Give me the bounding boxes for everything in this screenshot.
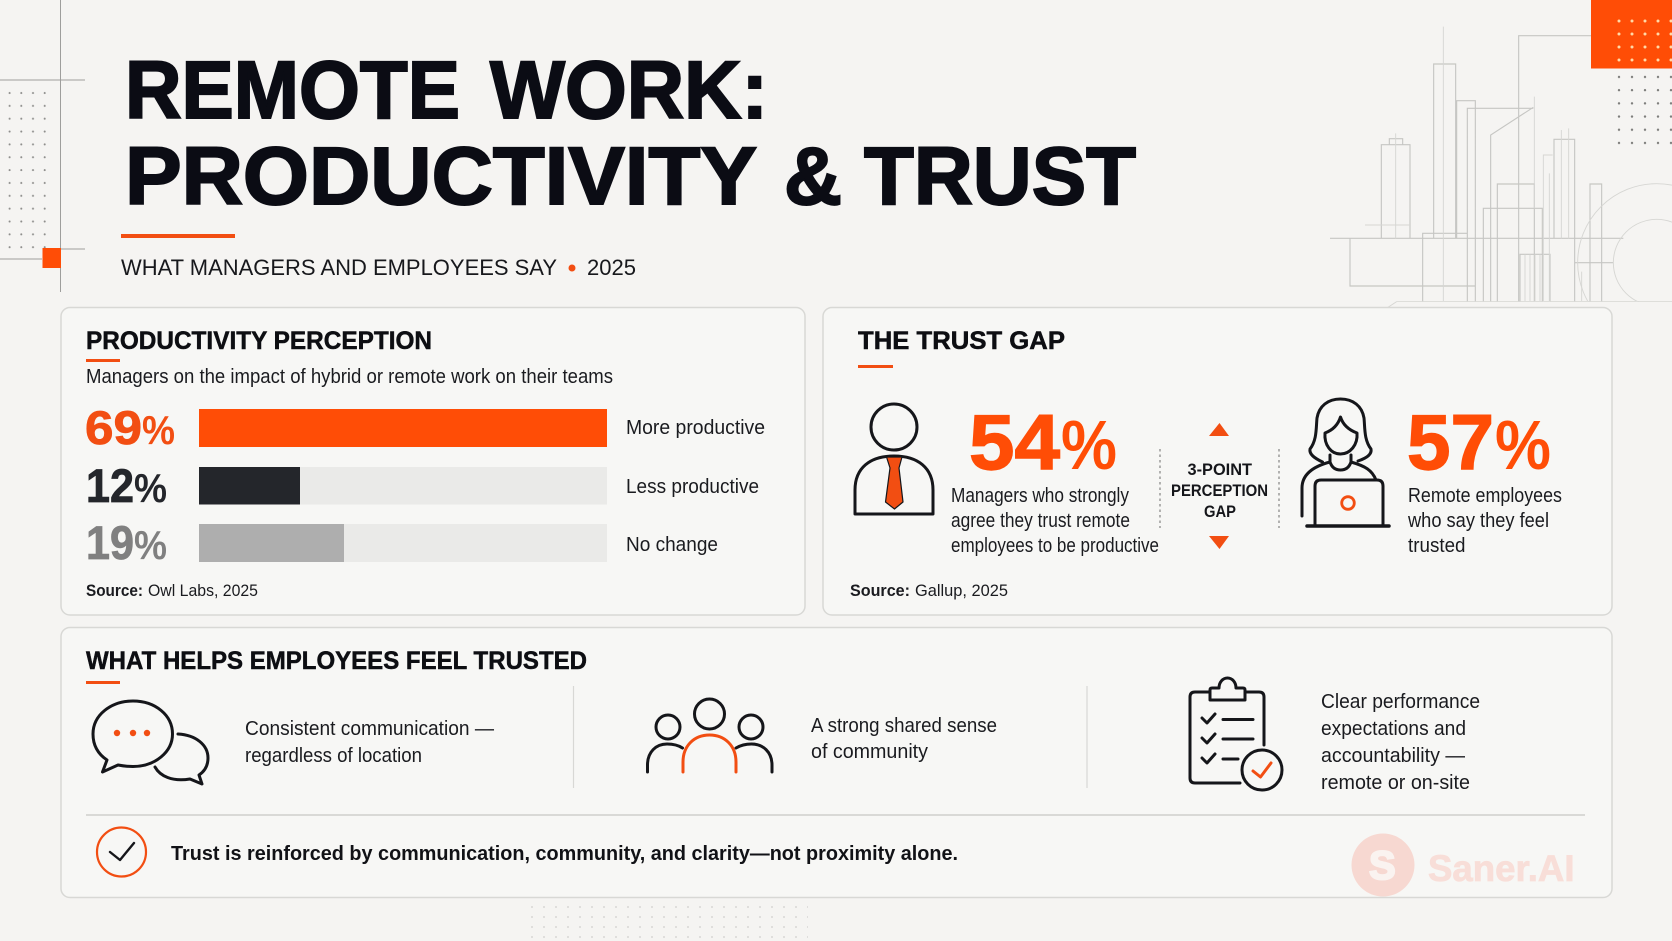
stat: 54% managers: % [1061, 406, 1117, 484]
callout: 3-point perception gap: PERCEPTION [1171, 482, 1268, 500]
heading: what helps employees feel trusted: WHAT HELPS EMPLOYEES FEEL TRUSTED [86, 647, 587, 675]
bar row: 69% more productive: % [142, 407, 175, 453]
stat: 57% remote employees: who say they feel [1407, 510, 1549, 532]
item: consistent communication [93, 701, 494, 784]
bar row: 12% less productive: 12 [86, 459, 134, 512]
text: clear performance expectations: Clear performance [1321, 691, 1480, 713]
title [125, 45, 1136, 222]
source: Gallup: Gallup, 2025 [915, 581, 1008, 600]
callout: trust statement: Trust is reinforced by communication, community, and clarity—not proximity alone. [171, 842, 958, 865]
icon: speech bubbles [93, 701, 208, 784]
text: clear performance expectations [1321, 691, 1480, 794]
heading accent rule [86, 359, 120, 362]
stat: 57% remote employees: 57 [1407, 398, 1494, 486]
stat: 54% managers: agree they trust remote [951, 510, 1130, 532]
text: shared sense of community [811, 715, 997, 763]
bar row: 19% no change: No change [626, 534, 718, 556]
stat: 57% remote employees: Remote employees [1408, 485, 1562, 507]
source: Owl Labs: Source: [86, 581, 143, 600]
watermark: Saner.AI: Saner.AI [1428, 848, 1574, 889]
panel: productivity perception [61, 308, 805, 615]
text: consistent communication: regardless of location [245, 745, 422, 767]
item: clear performance expectations [1190, 678, 1480, 794]
decoration: top-right orange block with dots [1591, 0, 1672, 150]
heading: productivity perception: PRODUCTIVITY PERCEPTION [86, 327, 432, 355]
source: Gallup: Source: [850, 581, 910, 600]
heading: the trust gap: THE TRUST GAP [858, 327, 1065, 355]
decoration: line-art city skyline [1330, 27, 1672, 342]
title: & [784, 131, 842, 222]
stat: 54% managers [951, 398, 1159, 557]
title accent rule [121, 234, 235, 238]
title: TRUST [864, 131, 1136, 222]
text: clear performance expectations: remote or on-site [1321, 772, 1470, 794]
text: shared sense of community: of community [811, 741, 928, 763]
stat: 57% remote employees: trusted [1408, 535, 1466, 557]
callout: 3-point perception gap: GAP [1204, 503, 1236, 521]
callout: trust statement [97, 828, 958, 876]
stat: 54% managers: 54 [969, 398, 1060, 486]
panel: what helps employees feel trusted [61, 628, 1612, 898]
title: PRODUCTIVITY [125, 131, 757, 222]
panel: the trust gap [823, 308, 1612, 615]
bar row: 12% less productive: Less productive [626, 476, 759, 498]
bar row: 69% more productive: More productive [626, 417, 765, 439]
panel subtitle: Managers on the impact of hybrid or remote work on their teams [86, 366, 613, 388]
source: Owl Labs: Owl Labs, 2025 [148, 581, 258, 600]
bar row: 19% no change: % [134, 522, 167, 568]
heading accent rule [858, 365, 893, 368]
item: shared sense of community [648, 699, 997, 772]
icon: clipboard with check [1190, 678, 1282, 790]
bar row: 19% no change [86, 516, 718, 569]
watermark: Saner.AI [1352, 834, 1574, 896]
text: clear performance expectations: accountability — [1321, 745, 1465, 767]
stat: 57% remote employees [1407, 398, 1562, 557]
text: shared sense of community: A strong shared sense [811, 715, 997, 737]
icon: employee with laptop [1302, 399, 1389, 526]
title: REMOTE [125, 45, 460, 136]
source: Owl Labs [86, 581, 258, 600]
bar row: 69% more productive [85, 401, 765, 454]
text: clear performance expectations: expectations and [1321, 718, 1466, 740]
text: consistent communication [245, 718, 494, 767]
callout: 3-point perception gap: 3-POINT [1188, 461, 1252, 479]
stat: 54% managers: Managers who strongly [951, 485, 1129, 507]
subtitle: 2025 [587, 255, 636, 280]
decoration: bottom dot grid [526, 902, 808, 941]
bar row: 69% more productive: 69 [85, 401, 142, 454]
bar row: 12% less productive [86, 459, 759, 512]
decoration: top-left grid lines and dots [0, 0, 85, 292]
stat: 54% managers: employees to be productive [951, 535, 1159, 557]
watermark: Saner.AI: S [1369, 844, 1396, 888]
icon: group of people [648, 699, 772, 772]
heading accent rule [86, 681, 120, 684]
callout: 3-point perception gap [1160, 423, 1279, 549]
title: WORK: [490, 45, 768, 136]
icon: manager with tie [855, 404, 933, 514]
stat: 57% remote employees: % [1495, 406, 1551, 484]
bar row: 12% less productive: % [134, 465, 167, 511]
source: Gallup [850, 581, 1008, 600]
bar row: 19% no change: 19 [86, 516, 134, 569]
text: consistent communication: Consistent communication — [245, 718, 494, 740]
subtitle: WHAT MANAGERS AND EMPLOYEES SAY [121, 255, 557, 280]
